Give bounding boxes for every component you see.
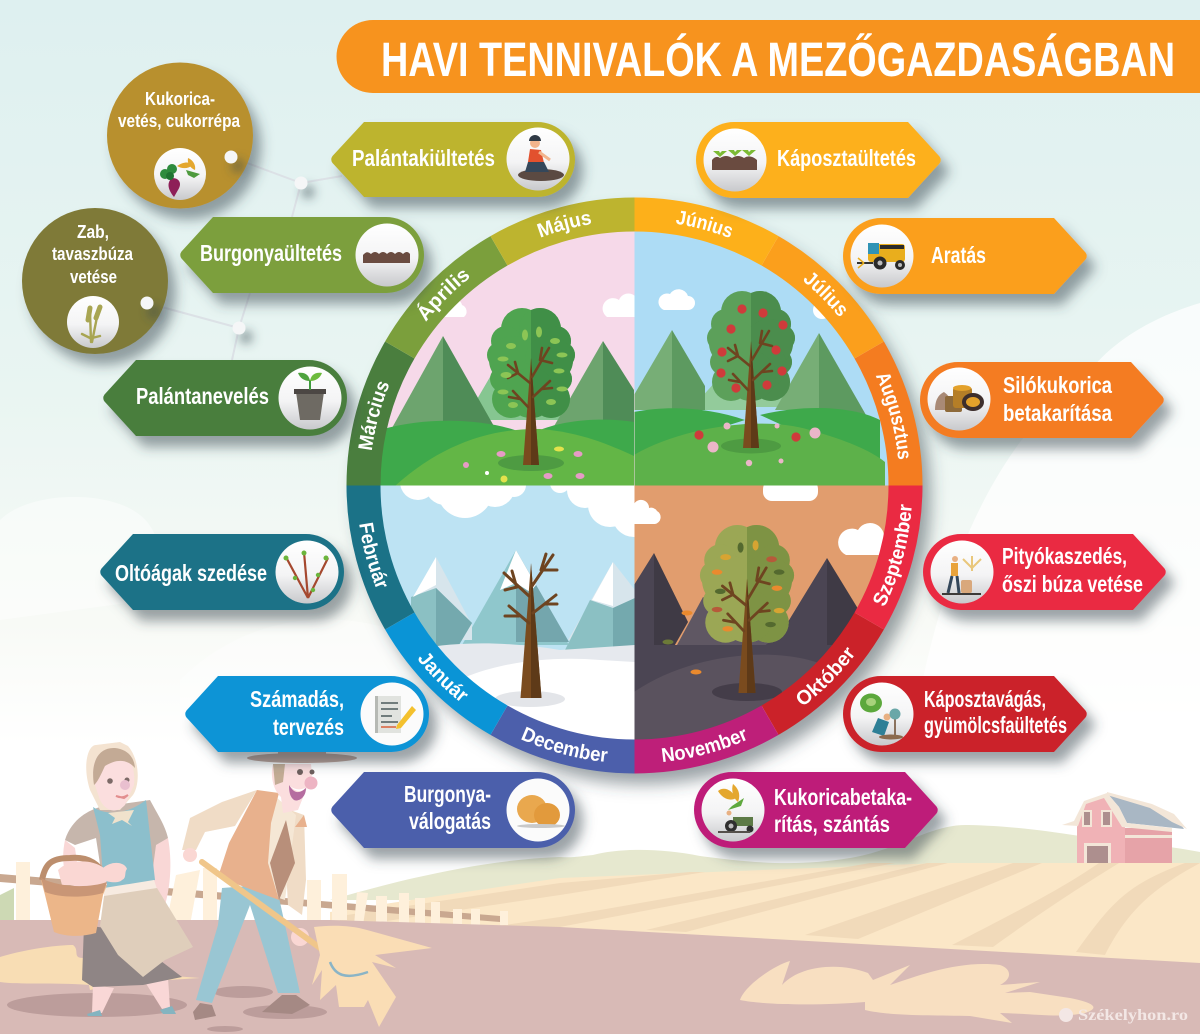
label: Kukoricabetakarítás, szántás: rítás, szántás — [774, 811, 890, 837]
month names: Június — [676, 210, 732, 238]
wheel shadow — [348, 198, 922, 772]
man arms and shirt — [182, 790, 257, 850]
tree: autumn — [700, 525, 794, 693]
month names: Február — [359, 522, 388, 587]
label: Számadás, tervezés: Számadás, — [250, 686, 344, 712]
label: Aratás: Aratás — [931, 242, 986, 268]
hay on ground, left — [0, 945, 200, 990]
fallen leaves — [662, 610, 702, 674]
basket — [42, 858, 104, 880]
segment: Január — [385, 612, 508, 735]
icon: wheat — [82, 307, 100, 342]
label: Káposztavágás, gyümölcsfaültetés: gyümölcsfaültetés — [924, 712, 1067, 738]
segment: Július — [762, 236, 884, 358]
label: Számadás, tervezés — [185, 676, 429, 752]
title banner — [336, 20, 1200, 93]
fence — [0, 862, 508, 925]
seasonal scenes — [370, 220, 900, 751]
icon: corn and tractor — [718, 784, 754, 832]
label: Káposztavágás, gyümölcsfaültetés — [843, 676, 1087, 752]
label: Palántakiültetés — [331, 122, 575, 197]
segment: Április — [385, 236, 508, 358]
ground — [0, 920, 1200, 1034]
junction dots — [140, 150, 308, 334]
woman — [7, 742, 193, 1017]
segment: December — [490, 706, 634, 774]
green patch behind fence — [0, 888, 14, 920]
background clouds — [0, 303, 1200, 860]
month names: Január — [418, 652, 468, 701]
label: Burgonyaválogatás: válogatás — [409, 808, 491, 834]
woman head — [86, 742, 138, 810]
segment: Augusztus — [854, 342, 922, 486]
month names: Szeptember — [874, 504, 912, 606]
icon: cabbage and gardener — [860, 694, 903, 740]
segment: Október — [762, 612, 884, 735]
month ring — [346, 198, 922, 774]
label: Káposztaültetés: Káposztaültetés — [777, 145, 916, 171]
month names — [358, 210, 912, 762]
segment: Június — [634, 198, 778, 266]
icon: seedling in pot — [294, 373, 326, 420]
label: Oltóágak szedése: Oltóágak szedése — [115, 560, 267, 586]
rake handle — [202, 862, 327, 953]
seasonal wheel — [345, 198, 942, 796]
quadrant: winter — [380, 486, 634, 707]
icon: man planting — [518, 135, 564, 181]
label: Silókukorica betakarítása: Silókukorica — [1003, 372, 1112, 398]
tree: winter — [504, 554, 557, 698]
label: Palántanevelés — [103, 360, 347, 436]
hay on ground, right — [740, 961, 1093, 1023]
hay bundle — [312, 926, 432, 1027]
icon: checklist with pencil — [375, 696, 416, 733]
icon: cut branches — [284, 550, 328, 598]
distant hills — [330, 825, 1200, 900]
month names: Március — [358, 382, 389, 450]
label: Pityókaszedés, őszi búza vetése: Pityókaszedés, — [1002, 543, 1127, 569]
segment: Március — [346, 342, 414, 486]
month names: Augusztus — [876, 374, 908, 460]
man — [182, 750, 432, 1032]
connector lines — [147, 157, 342, 360]
circle: Kukoricavetés, cukorrépa: Kukorica- — [145, 89, 215, 109]
icon: potatoes — [517, 795, 565, 828]
tree: spring — [487, 308, 575, 465]
label: Pityókaszedés, őszi búza vetése — [923, 534, 1166, 610]
segment: November — [634, 706, 778, 774]
man head — [247, 753, 357, 763]
label: Káposztavágás, gyümölcsfaültetés: Káposztavágás, — [924, 686, 1046, 712]
icon: combine harvester — [857, 243, 905, 270]
label: Burgonyaválogatás: Burgonya- — [404, 781, 491, 807]
label: Burgonyaültetés — [180, 217, 424, 293]
label: Palántakiültetés: Palántakiültetés — [352, 145, 495, 171]
label: Kukoricabetakarítás, szántás: Kukoricabetaka- — [774, 784, 912, 810]
man vest — [218, 790, 279, 900]
field furrows — [340, 863, 1200, 955]
circle: Zab, tavaszbúza vetése: vetése — [70, 267, 117, 287]
label: Silókukorica betakarítása — [920, 362, 1164, 438]
barn — [1062, 792, 1187, 863]
month names: Július — [804, 272, 846, 316]
segment: Május — [490, 198, 634, 266]
label: Számadás, tervezés: tervezés — [273, 714, 344, 740]
label: Oltóágak szedése — [100, 534, 344, 610]
label: Aratás — [843, 218, 1087, 294]
circle: Kukoricavetés, cukorrépa — [107, 62, 253, 208]
month names: Április — [417, 270, 470, 322]
label: Káposztaültetés — [696, 122, 941, 198]
label: Palántanevelés: Palántanevelés — [136, 383, 269, 409]
quadrant: summer — [634, 220, 900, 486]
icon: soil row — [363, 252, 410, 263]
circle: Zab, tavaszbúza vetése: tavaszbúza — [52, 244, 134, 264]
segment: Szeptember — [854, 486, 922, 630]
label: Kukoricabetakarítás, szántás — [694, 772, 938, 848]
tree: summer — [707, 291, 795, 448]
quadrant: spring — [370, 220, 635, 486]
month names: November — [662, 729, 746, 762]
icon: farmer with sack — [942, 556, 981, 594]
label: Pityókaszedés, őszi búza vetése: őszi búza vetése — [1002, 571, 1143, 597]
farm landscape — [0, 742, 1200, 1034]
month names: Május — [536, 214, 591, 238]
icon: seedlings in soil — [712, 150, 757, 170]
label: Burgonyaültetés: Burgonyaültetés — [200, 240, 342, 266]
watermark: Székelyhon.ro — [1078, 1007, 1188, 1024]
month names: Október — [796, 647, 854, 704]
label: Silókukorica betakarítása: betakarítása — [1003, 400, 1112, 426]
circle: Kukoricavetés, cukorrépa: vetés, cukorrépa — [118, 111, 241, 131]
circle: Zab, tavaszbúza vetése — [22, 208, 168, 354]
month names: December — [521, 726, 608, 762]
icon: beet and corn — [160, 158, 200, 197]
segment: Február — [346, 486, 414, 630]
ploughed field — [330, 863, 1200, 965]
label: Burgonyaválogatás — [331, 772, 575, 848]
icon: sacks — [935, 385, 984, 412]
quadrant: autumn — [634, 486, 888, 740]
circle: Zab, tavaszbúza vetése: Zab, — [77, 222, 109, 242]
